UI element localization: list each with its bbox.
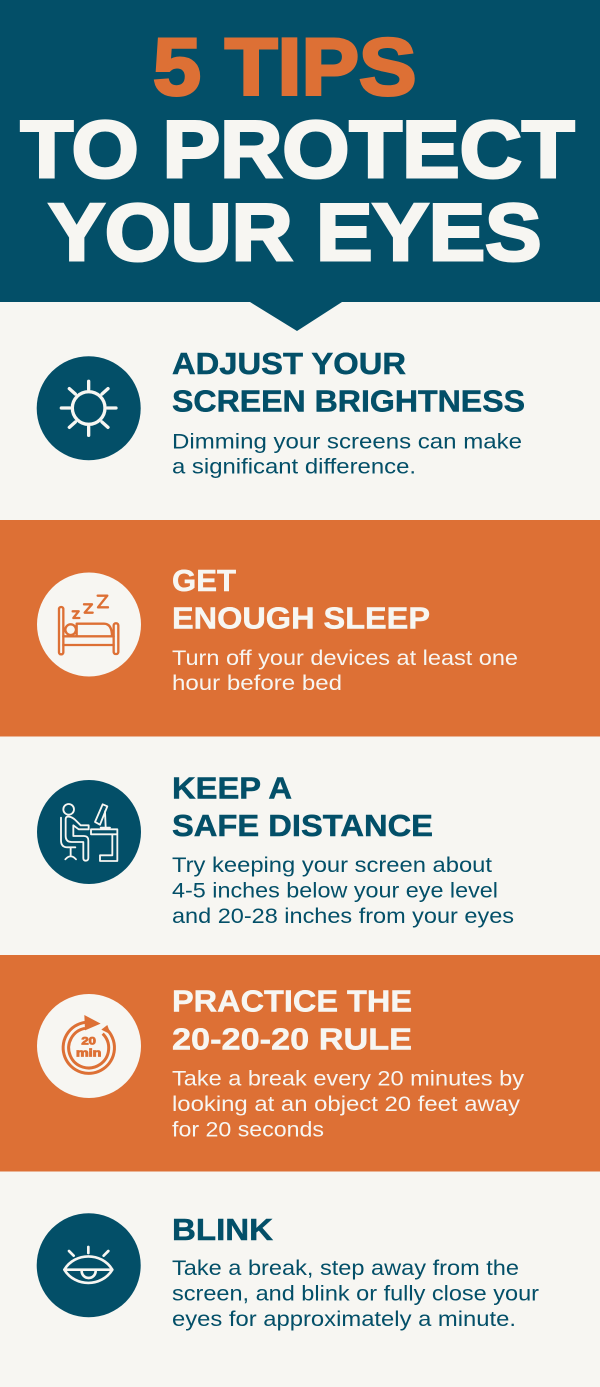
body text bbox=[172, 430, 522, 478]
heading bbox=[172, 984, 412, 1056]
body text bbox=[172, 1256, 539, 1331]
heading bbox=[172, 770, 433, 843]
panel: blink bbox=[37, 1212, 539, 1331]
panel: safe distance bbox=[37, 770, 514, 928]
heading: GET bbox=[172, 563, 236, 598]
body text: Take a break, step away from the bbox=[172, 1256, 519, 1280]
heading: BLINK bbox=[172, 1212, 274, 1247]
title: to protect: TO PROTECT bbox=[20, 105, 574, 195]
heading bbox=[172, 563, 430, 636]
body text bbox=[172, 853, 514, 928]
heading: ADJUST YOUR bbox=[172, 346, 406, 381]
header banner bbox=[0, 0, 600, 331]
icon: bed bbox=[37, 572, 141, 676]
icon: 20 minute timer: min bbox=[76, 1047, 102, 1059]
body text bbox=[172, 646, 518, 695]
body text: hour before bed bbox=[172, 671, 342, 695]
panel: 20-20-20 rule bbox=[0, 955, 600, 1172]
heading: PRACTICE THE bbox=[172, 984, 412, 1018]
body text: for 20 seconds bbox=[172, 1118, 324, 1142]
heading: SAFE DISTANCE bbox=[172, 808, 433, 843]
body text: eyes for approximately a minute. bbox=[172, 1307, 516, 1331]
title: 5 tips: 5 TIPS bbox=[153, 22, 416, 112]
icon: 20 minute timer: 20 bbox=[81, 1035, 96, 1047]
heading bbox=[172, 346, 525, 418]
body text: Dimming your screens can make bbox=[172, 430, 522, 454]
body text: Take a break every 20 minutes by bbox=[172, 1066, 524, 1090]
body text: Turn off your devices at least one bbox=[172, 646, 518, 670]
panel: enough sleep bbox=[0, 520, 600, 736]
icon: sun bbox=[37, 356, 141, 460]
body text: and 20-28 inches from your eyes bbox=[172, 904, 514, 928]
body text: a significant difference. bbox=[172, 454, 416, 478]
body text: looking at an object 20 feet away bbox=[172, 1092, 520, 1116]
icon: person at desk bbox=[37, 780, 141, 884]
panel: adjust brightness bbox=[37, 346, 525, 478]
heading: ENOUGH SLEEP bbox=[172, 600, 430, 636]
body text: Try keeping your screen about bbox=[172, 853, 492, 877]
icon: 20 minute timer bbox=[37, 994, 141, 1098]
icon: eye bbox=[37, 1213, 141, 1317]
body text bbox=[172, 1066, 524, 1142]
heading: SCREEN BRIGHTNESS bbox=[172, 384, 525, 418]
body text: 4-5 inches below your eye level bbox=[172, 878, 498, 902]
heading: 20-20-20 RULE bbox=[172, 1022, 412, 1056]
heading: KEEP A bbox=[172, 770, 292, 806]
title: your eyes: YOUR EYES bbox=[48, 188, 542, 278]
body text: screen, and blink or fully close your bbox=[172, 1282, 539, 1306]
